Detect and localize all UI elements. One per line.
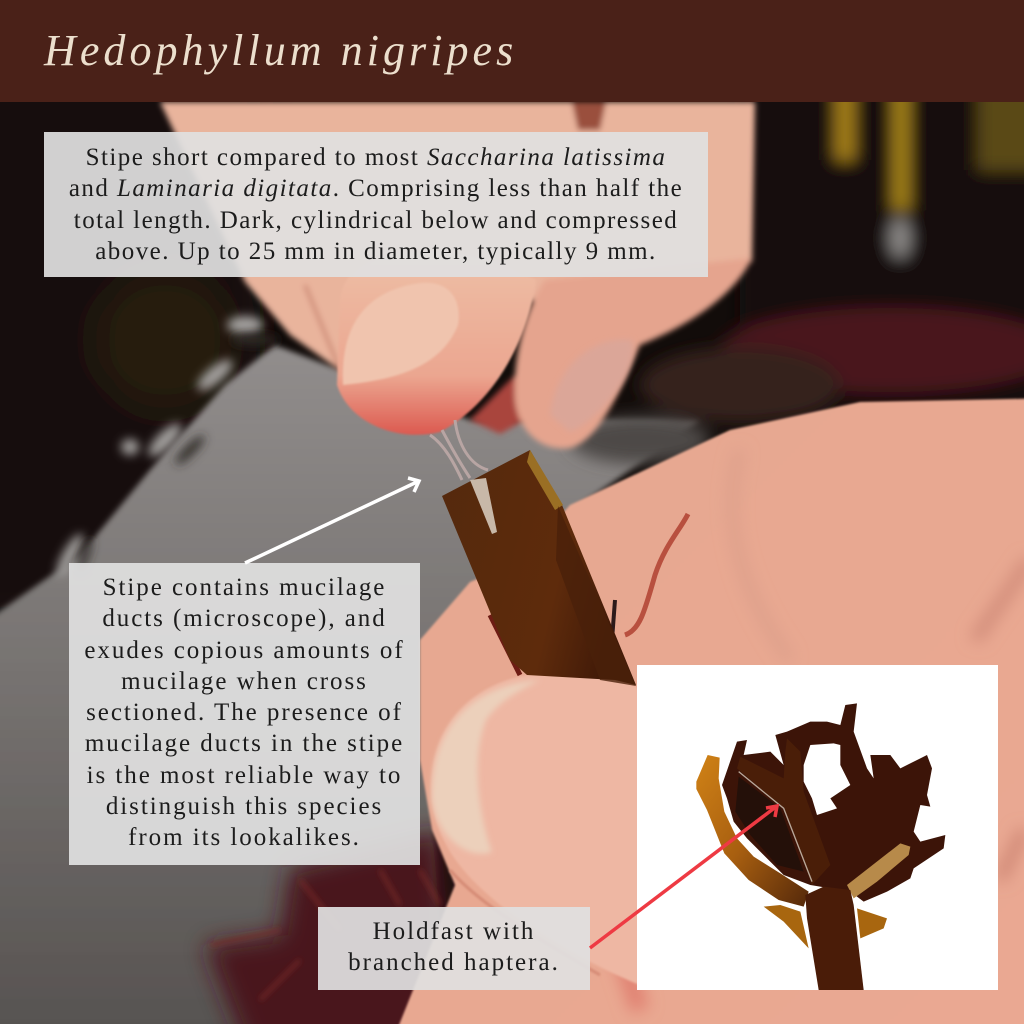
- hand shading: [620, 450, 1024, 1010]
- text box: mucilage ducts: mucilage when cross: [121, 668, 368, 695]
- dark tissue mass: [722, 703, 945, 902]
- text box: holdfast: Holdfast with: [373, 918, 535, 945]
- text box: mucilage ducts: [69, 563, 420, 865]
- title: Hedophyllum nigripes: [44, 26, 517, 75]
- branched haptera: [737, 738, 830, 885]
- text box: stipe description: [44, 132, 708, 277]
- dark right background with red weed: [570, 80, 1024, 464]
- opening between branches: [804, 743, 850, 815]
- stem: [805, 887, 864, 990]
- left orange haptera: [696, 755, 809, 907]
- dark shore left: [0, 60, 260, 620]
- inset photo: holdfast: [637, 665, 998, 990]
- text box: mucilage ducts: Stipe contains mucilage: [103, 574, 386, 601]
- text box: mucilage ducts: sectioned. The presence of: [86, 699, 403, 726]
- text box: mucilage ducts: from its lookalikes.: [128, 824, 361, 851]
- lower hand: [385, 398, 1024, 1024]
- shadow behind branch: [735, 777, 804, 872]
- pale haptera: [847, 843, 910, 898]
- stipe: [442, 450, 636, 685]
- thumb of top hand: [337, 251, 633, 435]
- text box: mucilage ducts: ducts (microscope), and: [102, 605, 387, 632]
- red weed bottom: [205, 830, 460, 1024]
- text box: mucilage ducts: is the most reliable way to: [87, 762, 402, 789]
- lower small haptera: [764, 905, 809, 948]
- text box: stipe description: Stipe short compared to most Saccharina latissima: [86, 144, 666, 171]
- text box: mucilage ducts: exudes copious amounts of: [84, 637, 405, 664]
- text box: stipe description: total length. Dark, cylindrical below and compressed: [74, 207, 678, 234]
- text box: stipe description: above. Up to 25 mm in diameter, typically 9 mm.: [95, 238, 657, 265]
- text box: holdfast: [318, 907, 590, 990]
- shore speckles: [52, 316, 263, 579]
- grey water: [0, 345, 700, 1024]
- arrow: white to stipe: [245, 478, 419, 563]
- header band: [0, 0, 1024, 102]
- mucilage strand: [430, 420, 488, 480]
- arrow: red to haptera: [590, 806, 777, 948]
- text box: holdfast: branched haptera.: [348, 949, 560, 976]
- upper hand fingers: [160, 102, 755, 448]
- lower thumb: [431, 672, 640, 985]
- text box: stipe description: and Laminaria digitata. Comprising less than half the: [69, 175, 683, 202]
- red worm: [625, 514, 688, 635]
- text box: mucilage ducts: distinguish this species: [106, 793, 383, 820]
- text box: mucilage ducts: mucilage ducts in the stipe: [85, 730, 404, 757]
